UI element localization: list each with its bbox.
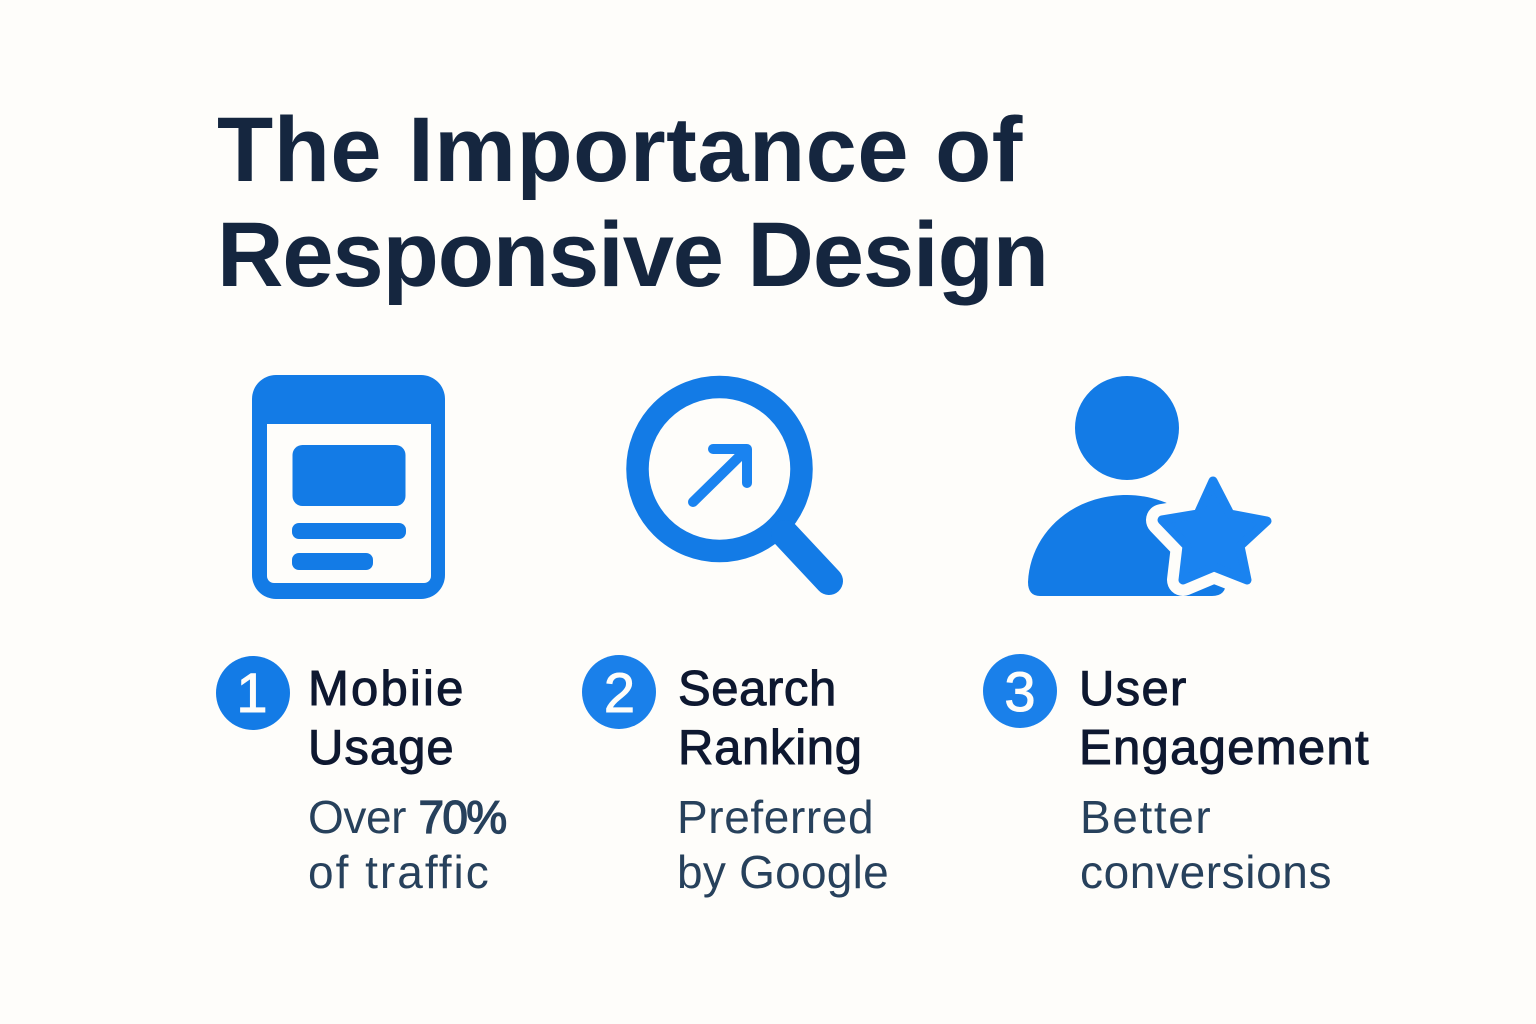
icon: browser page	[252, 375, 445, 599]
text: Over 70% of traffic	[308, 791, 506, 898]
badge 3	[983, 654, 1057, 728]
badge 2: 2	[604, 661, 635, 724]
heading: Mobile Usage	[308, 662, 466, 775]
badge 1: 1	[236, 661, 268, 724]
heading: Mobile Usage: Mobiie	[308, 662, 466, 716]
text: Better conversions: conversions	[1080, 846, 1332, 898]
title: The Importance of	[217, 99, 1023, 201]
heading: User Engagement	[1079, 662, 1370, 775]
heading: User Engagement: Engagement	[1079, 721, 1370, 775]
text: Better conversions: Better	[1080, 791, 1212, 843]
heading: Search Ranking: Search	[678, 662, 837, 716]
text: Preferred by Google: by Google	[677, 846, 889, 898]
title	[217, 99, 1048, 306]
text: Over 70% of traffic: Over 70%	[308, 791, 505, 843]
heading: Search Ranking: Ranking	[678, 721, 863, 775]
heading: Mobile Usage: Usage	[308, 721, 455, 775]
text: Better conversions	[1080, 791, 1332, 898]
heading: Search Ranking	[678, 662, 863, 775]
text: Over 70% of traffic: of traffic	[308, 846, 491, 898]
icon: user with star	[1028, 376, 1267, 596]
title: Responsive Design	[217, 204, 1048, 306]
text: Preferred by Google: Preferred	[677, 791, 874, 843]
badge 2	[582, 655, 656, 729]
text: Preferred by Google	[677, 791, 889, 898]
badge 3: 3	[1004, 660, 1036, 723]
icon: magnifier with arrow	[638, 387, 829, 581]
heading: User Engagement: User	[1079, 662, 1188, 716]
badge 1	[216, 656, 290, 730]
